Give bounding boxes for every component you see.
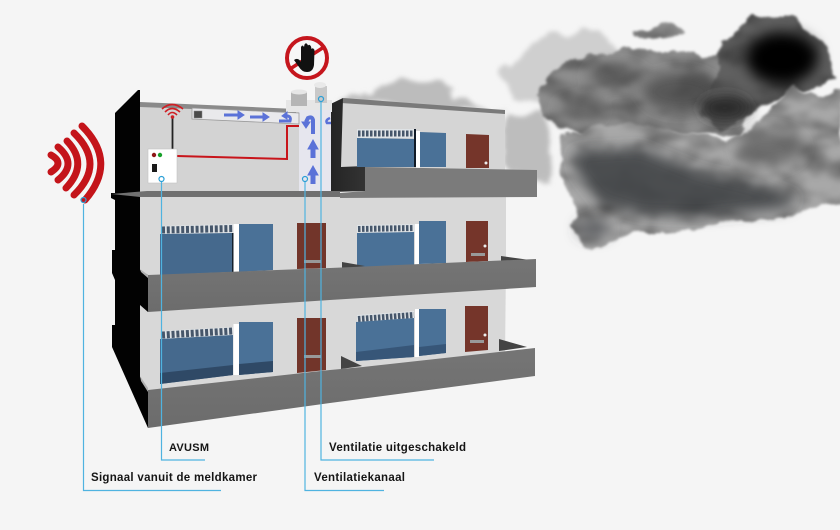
callout: Ventilatiekanaal (302, 176, 405, 490)
callout: Ventilatiekanaal: Ventilatiekanaal (314, 472, 405, 484)
callout: Signaal vanuit de meldkamer: Signaal vanuit de meldkamer (91, 472, 258, 484)
black side wall (111, 90, 148, 428)
icon: stop sign with hand (287, 38, 327, 78)
callout: Ventilatie uitgeschakeld: Ventilatie uitgeschakeld (329, 442, 466, 454)
smoke cloud (340, 18, 840, 248)
top balcony (340, 167, 537, 198)
building (111, 82, 537, 428)
callout: Signaal vanuit de meldkamer (81, 198, 258, 490)
dark side of upper apartment (312, 98, 365, 192)
upper apartment roof (341, 98, 505, 114)
middle floor windows and doors (160, 221, 488, 275)
icon: signal from control room (51, 126, 101, 200)
dark band in lower smoke (572, 130, 802, 237)
lower smoke body (556, 88, 840, 248)
ventilation chimneys (286, 82, 332, 112)
vertical ventilation duct (299, 110, 331, 191)
small antenna (162, 104, 183, 150)
callout: Ventilatie uitgeschakeld (318, 96, 466, 460)
ground floor windows and doors (160, 306, 488, 384)
lower facade (140, 196, 506, 400)
upper grey smoke (540, 26, 760, 135)
rear roof wall (140, 105, 300, 192)
horizontal ventilation duct (192, 108, 299, 124)
middle balcony (140, 256, 536, 312)
airflow arrows (224, 111, 331, 184)
dark upper-right smoke (702, 18, 836, 130)
AVUSM control box (148, 149, 177, 183)
roof slab edge (111, 191, 340, 197)
roof edge (140, 102, 296, 113)
signal cable (177, 126, 299, 159)
thin smoke above the roof (340, 28, 625, 182)
top floor windows and door (357, 129, 489, 168)
callout: AVUSM (159, 176, 209, 460)
callout: AVUSM: AVUSM (169, 442, 209, 454)
ground balcony (140, 339, 535, 428)
upper apartment wall (341, 102, 505, 172)
duct grille (194, 111, 202, 118)
black core of smoke (701, 32, 818, 120)
dark mottling in upper smoke (558, 65, 718, 120)
